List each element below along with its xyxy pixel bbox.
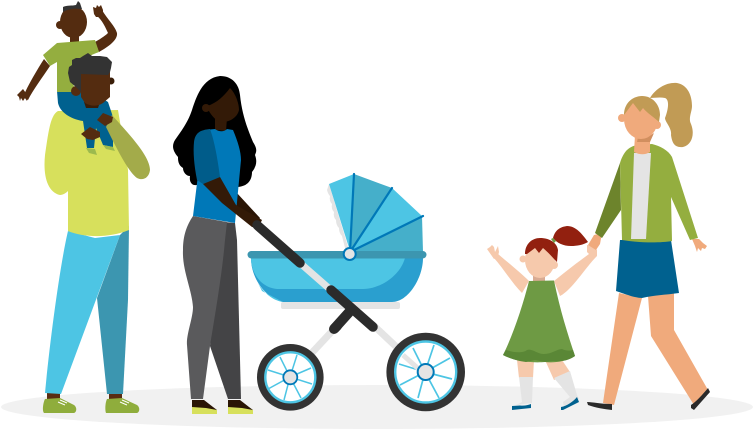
father's legs and trousers xyxy=(45,226,129,399)
child's green shirt xyxy=(43,40,99,92)
ground shadow xyxy=(1,385,753,429)
father's yellow shirt xyxy=(45,110,129,236)
blue skirt xyxy=(616,240,679,298)
woman's hands xyxy=(588,233,707,252)
socks xyxy=(516,371,579,407)
mother's shoes xyxy=(192,400,253,414)
father's raised sleeve xyxy=(106,115,150,179)
stroller xyxy=(248,174,465,411)
mother's trousers xyxy=(183,216,241,399)
figure: woman holding girl's hand xyxy=(587,83,710,410)
figure: father carrying child xyxy=(17,1,150,413)
left wheel xyxy=(257,344,324,411)
child's head xyxy=(56,1,87,45)
green cardigan xyxy=(620,144,698,242)
right wheel xyxy=(386,333,465,411)
far arm xyxy=(236,192,260,226)
blue top xyxy=(193,129,241,223)
long black hair xyxy=(173,76,256,187)
girl's legs xyxy=(517,360,570,380)
canopy xyxy=(329,174,423,252)
ponytail xyxy=(553,226,588,246)
figure: mother pushing stroller xyxy=(173,76,262,414)
child's shoes xyxy=(86,145,115,155)
carriage rim xyxy=(248,251,426,258)
carriage underside bar xyxy=(281,302,400,309)
handle xyxy=(257,225,373,329)
figure: girl xyxy=(487,226,597,410)
girl's neck and head xyxy=(520,238,558,282)
child's arms xyxy=(17,5,117,101)
white shirt xyxy=(631,153,651,239)
father's neck, head and hair xyxy=(68,53,114,108)
near arm xyxy=(203,177,262,228)
woman's shoes xyxy=(587,388,710,410)
canopy pivot xyxy=(344,248,356,260)
woman's ponytail xyxy=(650,83,693,147)
woman's neck and head xyxy=(618,96,661,154)
canopy shadow scallop xyxy=(327,184,349,250)
girl's arms and hands xyxy=(487,245,597,296)
carriage basket xyxy=(251,258,423,302)
stroller frame xyxy=(293,324,420,373)
dress hem xyxy=(503,349,575,362)
girl's shoes xyxy=(512,397,579,410)
mother's face and neck xyxy=(202,88,239,131)
hands holding child's legs xyxy=(81,113,113,140)
child's trousers xyxy=(57,91,113,148)
darker sleeve xyxy=(194,129,220,184)
dark sleeve xyxy=(595,163,621,238)
green dress xyxy=(503,280,575,362)
father's shoes xyxy=(43,398,139,413)
woman's legs xyxy=(603,293,708,405)
